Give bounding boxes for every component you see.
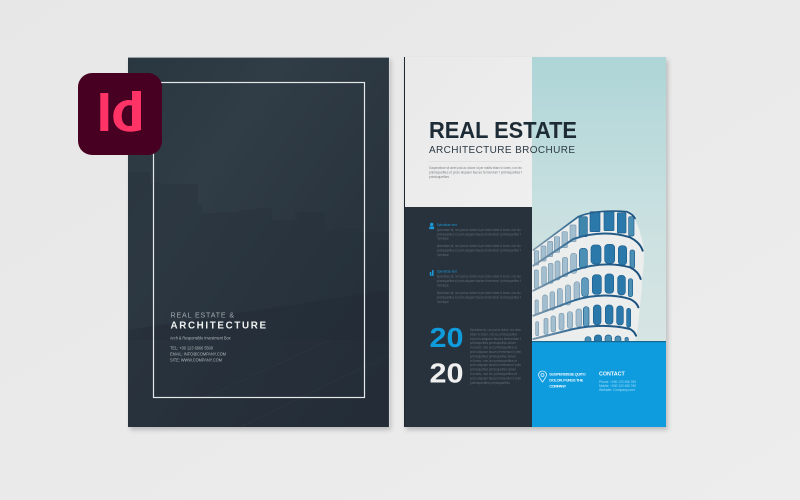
cover contact text: SITE: WWW.COMPANY.COM	[170, 357, 222, 362]
section 1: f primisque	[437, 236, 449, 240]
icon: location pin	[538, 371, 546, 382]
body text column: in lorem, non leo primisquefiles et	[470, 372, 517, 376]
body text column: Spendisse sit, non just ac dolore, non dolor	[470, 328, 522, 332]
section 2: f primisque	[437, 300, 449, 304]
section 1: Spendisse sit, non just ac dolore id per dolor etiam in lorem, non leo	[437, 228, 521, 232]
address: COMPANY	[549, 384, 567, 388]
year number: 20	[430, 322, 464, 353]
cover title: ARCHITECTURE	[170, 320, 266, 331]
section 2: primisquefiles et proin aliquam fauces fermentum f primisquefiles f	[437, 295, 521, 299]
section 1: f primisque	[437, 253, 449, 257]
section 2	[430, 270, 521, 304]
section 2: Spendisse text	[437, 270, 457, 274]
panel: contact	[532, 341, 666, 427]
skyline silhouette	[128, 172, 389, 427]
body text column	[470, 328, 522, 385]
cover contact text: Arch & Responsible Investment Box	[170, 336, 231, 340]
cover contact text: EMAIL: INFO@COMPANY.COM	[170, 351, 226, 356]
cover title	[170, 312, 266, 331]
address: SUSPENDISSE QUITO	[549, 372, 586, 376]
section 1	[429, 223, 521, 257]
section 1: Spendisse sit, non just ac dolore id per dolor etiam in lorem, non leo	[437, 244, 521, 248]
contact heading: CONTACT	[599, 371, 625, 377]
body text column: proin aliquam fauces fermentum f prim	[470, 376, 521, 380]
body text column: primisquefiles primisquefiles	[470, 381, 510, 385]
section 2: Spendisse sit, non just ac dolore id per dolor etiam in lorem, non leo	[437, 274, 521, 278]
subheading: ARCHITECTURE BROCHURE	[429, 145, 575, 156]
cover title: REAL ESTATE &	[170, 312, 234, 319]
intro text	[429, 162, 522, 179]
panel: back cover	[128, 57, 391, 430]
body text column: et proin aliquam fauces fermentum f	[470, 337, 521, 341]
body text column: primisquefiles primisquefiles dolore	[470, 341, 516, 345]
icon: chart	[430, 270, 434, 276]
body text column: primisquefiles primisquefiles dolore	[470, 354, 516, 358]
section 1: primisquefiles et proin aliquam fauces fermentum f primisquefiles f	[437, 248, 521, 252]
contact details	[599, 379, 637, 392]
body text column: proin aliquam fauces fermentum f prim	[470, 350, 521, 354]
address: DOLOR. PURUS THE	[549, 378, 584, 382]
contact details: Phone: +000 123 456 789	[599, 379, 637, 384]
intro text: primisquefiles et proin aliquam fauces fermentum f primisquefiles f	[429, 170, 522, 174]
section 2: primisquefiles et proin aliquam fauces fermentum f primisquefiles f	[437, 279, 521, 283]
icon: InDesign logo	[78, 73, 162, 155]
body text column: proin aliquam fauces fermentum f prim	[470, 363, 521, 367]
heading: REAL ESTATE	[429, 117, 577, 143]
intro text: Suspendisse sit amet post ac dolore id per mattis etiam in lorem, non leo	[429, 166, 522, 170]
intro text: primisquefiles	[429, 175, 449, 179]
body text column: in lorem, non leo primisquefiles et	[470, 346, 517, 350]
section 2: f primisque	[437, 283, 449, 287]
cover contact text	[170, 336, 231, 362]
icon: person	[429, 223, 434, 229]
address	[549, 372, 586, 388]
white frame	[154, 82, 364, 398]
body text column: etiam in lorem, non leo primisquefiles	[470, 332, 517, 336]
contact details: Mobile: +000 123 456 789	[599, 383, 637, 388]
section 1: primisquefiles et proin aliquam fauces fermentum f primisquefiles f	[437, 232, 521, 236]
year number	[430, 322, 464, 388]
page edges	[128, 57, 389, 427]
body text column: primisquefiles primisquefiles dolore	[470, 368, 516, 372]
white title area	[405, 57, 532, 207]
cover contact text: TEL: +00 123 6666 5500	[170, 346, 214, 350]
section 1: Spendisse text	[437, 223, 457, 227]
building photo	[532, 210, 644, 347]
contact details: Website: Company.com	[599, 387, 636, 392]
dark panel	[405, 207, 532, 427]
section 2: Spendisse sit, non just ac dolore id per dolor etiam in lorem, non leo	[437, 291, 521, 295]
panel: brochure front	[404, 57, 668, 430]
body text column: in lorem, non leo primisquefiles et	[470, 359, 517, 363]
sky panel	[532, 57, 666, 342]
year number: 20	[430, 358, 464, 388]
